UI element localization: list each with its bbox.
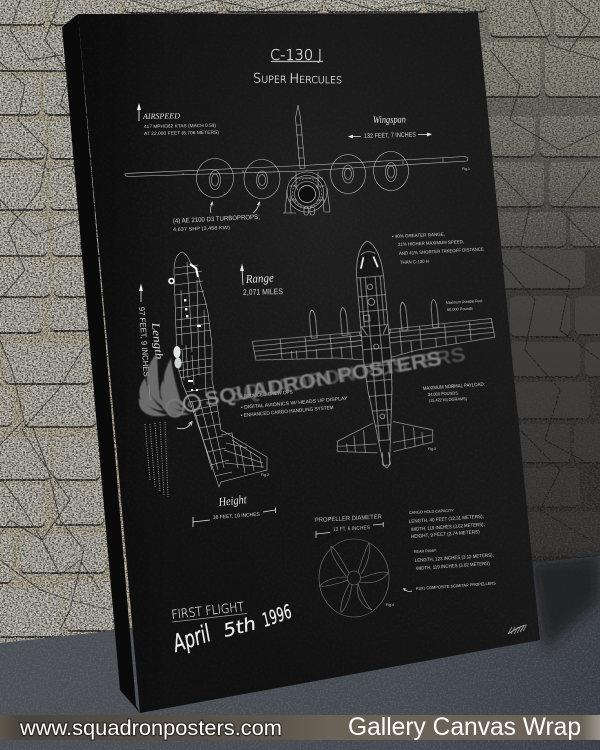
fig label 1: Fig.1 xyxy=(462,167,470,171)
canvas front face xyxy=(78,13,540,713)
performance notes xyxy=(392,232,484,265)
engine callout: 4,637 SHP (3,458 KW) xyxy=(173,225,230,233)
front view aircraft xyxy=(125,105,468,215)
arrow: wingspan right xyxy=(418,133,431,136)
blades xyxy=(320,543,388,612)
performance notes: AND 41% SHORTER TAKEOFF DISTANCE xyxy=(399,247,484,256)
cockpit windows xyxy=(360,256,378,269)
feature list xyxy=(241,389,349,419)
length callout: Length xyxy=(149,321,165,361)
panel: concrete floor xyxy=(0,556,600,750)
payload callout xyxy=(423,382,485,403)
arrow: range xyxy=(240,265,244,285)
propeller diameter callout: 13 FT, 6 INCHES xyxy=(333,525,371,533)
tail fin xyxy=(296,105,305,168)
airspeed callout: AT 22,000 FEET (6,706 METERS) xyxy=(144,130,219,136)
wingspan callout xyxy=(349,114,431,140)
cargo hold specs: CARGO HOLD CAPACITY xyxy=(409,508,454,515)
tail cap xyxy=(381,452,391,468)
watermark: squadron posters: c xyxy=(187,398,194,410)
watermark: squadron posters xyxy=(139,344,467,416)
payload callout: 34,000 POUNDS xyxy=(428,390,458,397)
cargo hold specs: WIDTH, 119 INCHES (3.02 METERS); xyxy=(411,522,485,533)
first flight date: April xyxy=(168,619,214,658)
title: C-130 J xyxy=(270,46,322,64)
signature xyxy=(508,625,527,634)
arrow: propeller note xyxy=(404,589,412,591)
fuel callout xyxy=(446,298,483,312)
caption bar xyxy=(0,713,600,741)
cargo hold specs: WIDTH, 119 INCHES (3.02 METERS) xyxy=(416,561,490,572)
length callout xyxy=(137,285,165,400)
watermark: squadron posters: SQUADRON POSTERS xyxy=(203,348,443,411)
left wall bricks xyxy=(0,0,421,636)
propeller diameter callout xyxy=(315,513,383,538)
website url: www.squadronposters.com xyxy=(19,716,282,740)
internal structure xyxy=(175,265,232,476)
range callout: 2,071 MILES xyxy=(243,287,283,297)
propeller note: R391 COMPOSITE SCIMITAR PROPELLERS xyxy=(416,580,496,591)
feature list: • ENHANCED CARGO HANDLING SYSTEM xyxy=(241,405,334,419)
first flight date xyxy=(168,601,295,658)
height callout: Height xyxy=(217,492,248,509)
fig label 2: Fig.2 xyxy=(261,473,269,477)
payload callout: MAXIMUM NORMAL PAYLOAD: xyxy=(423,382,485,392)
airspeed callout: 417 MPH/362 KTAS (MACH 0.59) xyxy=(144,123,216,129)
cargo hold specs: LENGTH, 123 INCHES (3.12 METERS); xyxy=(415,552,494,564)
wing xyxy=(125,156,468,176)
first flight date: 1996 xyxy=(259,601,295,632)
fuselage front xyxy=(287,172,327,212)
target roundel xyxy=(169,279,174,283)
fuel callout: Maximum Useable Fuel: xyxy=(446,298,483,305)
engine callout xyxy=(173,202,260,233)
engine callout: (4) AE 2100 D3 TURBOPROPS; xyxy=(173,214,260,225)
fine print columns (illegible in source) xyxy=(145,422,168,497)
cargo hold specs xyxy=(409,508,494,572)
panel: canvas wrap xyxy=(62,13,540,713)
side view aircraft xyxy=(169,252,267,487)
first flight label: FIRST FLIGHT xyxy=(171,599,245,622)
subtitle: SUPER HERCULES xyxy=(253,72,342,87)
floor shadow behind canvas xyxy=(530,556,600,650)
cargo hold specs: REAR RAMP: xyxy=(414,548,437,554)
engines xyxy=(309,299,439,338)
top view aircraft xyxy=(244,231,505,479)
nose details xyxy=(190,264,198,277)
fuselage xyxy=(353,240,401,466)
product name: Gallery Canvas Wrap xyxy=(348,713,581,741)
height callout: 38 FEET, 10 INCHES xyxy=(213,512,261,521)
tailplane xyxy=(335,418,434,456)
first flight date: 5th xyxy=(221,613,258,642)
performance notes: • 40% GREATER RANGE, xyxy=(392,232,445,239)
copyright ring xyxy=(184,395,200,411)
cargo hold specs: LENGTH, 40 FEET (12.31 METERS); xyxy=(409,514,484,525)
feature list: • DIGITAL AVIONICS W/ HEADS UP DISPLAY xyxy=(241,396,349,411)
performance notes: 21% HIGHER MAXIMUM SPEED, xyxy=(398,239,464,247)
performance notes: THAN C-130 H xyxy=(400,259,429,265)
height callout xyxy=(193,492,276,527)
dimension bracket xyxy=(193,508,276,527)
side windows xyxy=(184,299,201,391)
wingspan callout: 132 FEET, 7 INCHES xyxy=(364,132,417,140)
logo wings xyxy=(139,353,190,416)
airspeed callout: AIRSPEED xyxy=(142,111,180,121)
arrow: fine print xyxy=(177,422,192,429)
length callout: 97 FEET, 9 INCHES xyxy=(137,307,151,377)
right wall bricks xyxy=(426,0,600,556)
fig label 3: Fig.3 xyxy=(428,447,436,451)
propeller blobs xyxy=(173,346,181,358)
wingspan callout: Wingspan xyxy=(373,114,406,126)
propeller diameter callout: PROPELLER DIAMETER xyxy=(315,513,383,524)
feature list: • REDUCED CREW OPS xyxy=(241,389,294,400)
payload callout: (15,422 KILOGRAMS) xyxy=(429,396,468,403)
fuel callout: 60,000 Pounds xyxy=(447,306,473,312)
arrow: airspeed xyxy=(137,104,141,121)
range callout: Range xyxy=(245,271,275,286)
canvas spine xyxy=(62,14,140,713)
fuselage outline xyxy=(174,252,267,487)
airspeed callout xyxy=(137,104,219,136)
landing gear xyxy=(283,188,330,213)
arrow: length xyxy=(139,285,143,302)
propeller discs xyxy=(196,152,408,198)
propeller diagram xyxy=(319,539,389,617)
arrow: engine 1 xyxy=(211,202,213,213)
wing xyxy=(252,318,496,369)
watermark: squadron posters: SQUADRON POSTERS xyxy=(227,344,467,407)
range callout xyxy=(240,265,283,297)
arrow: engine 2 xyxy=(253,202,260,213)
cargo hold specs: HEIGHT, 9 FEET (2.74 METERS) xyxy=(411,529,480,540)
fig label 4: Fig.4 xyxy=(386,603,394,607)
arrow: wingspan left xyxy=(349,135,361,138)
